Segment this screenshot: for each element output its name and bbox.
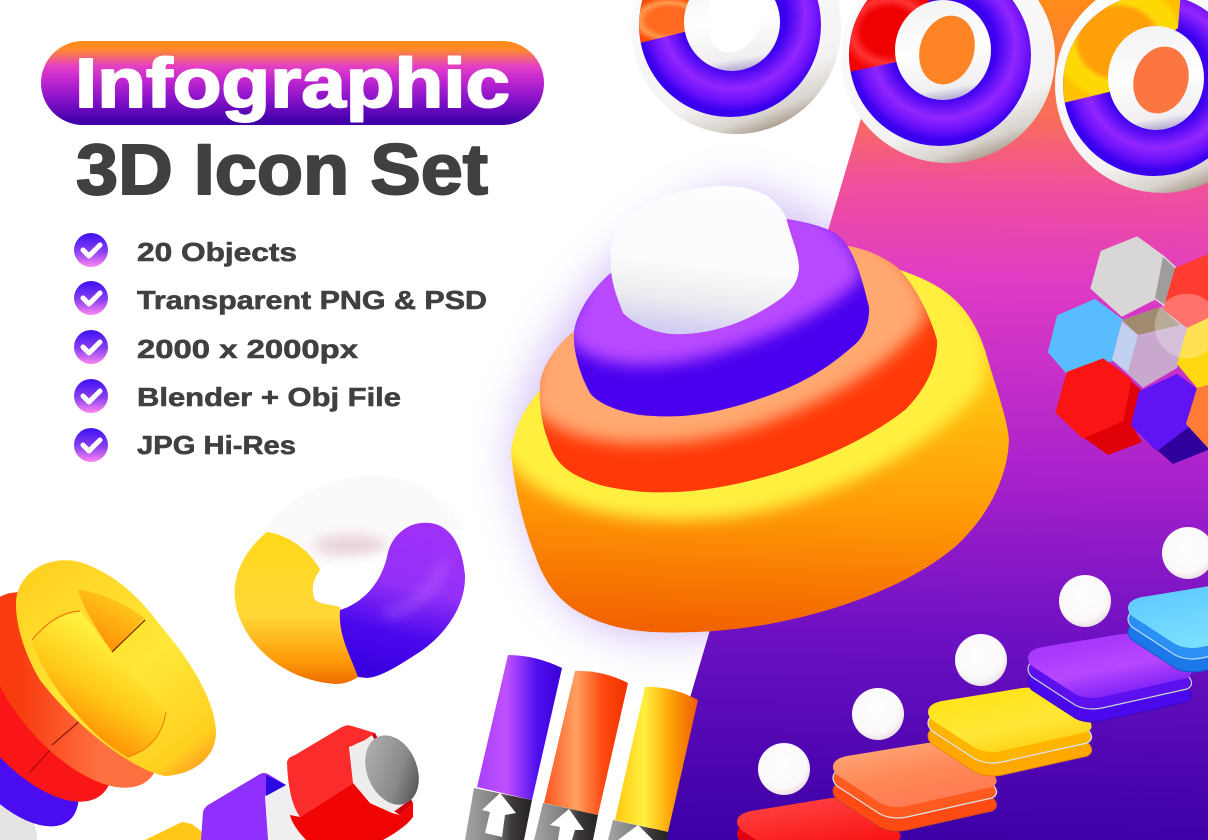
item: 20 Objects: 20 Objects: [137, 237, 297, 267]
yellow base layer: [495, 250, 1009, 633]
dark inner of red clip: [349, 733, 413, 815]
red hexagon lower: [1083, 380, 1143, 455]
top donut chart left: [630, 0, 841, 134]
item: 20 Objects: [74, 233, 297, 267]
item: JPG Hi-Res: [74, 428, 296, 462]
purple plate: [1028, 634, 1192, 722]
white tube: [266, 784, 312, 840]
orange plate: [833, 743, 997, 831]
main layered cone shape: [495, 186, 1009, 633]
orange hexagon: [1186, 385, 1208, 448]
arrow on orange bar: [550, 809, 584, 840]
white hexagon: [1092, 238, 1175, 315]
purple segment: [340, 523, 465, 678]
yellow plate: [928, 688, 1092, 776]
title word: Infographic: [75, 44, 510, 122]
lavender glow behind main shape: [511, 186, 1009, 640]
white top layer: [611, 186, 799, 334]
white cylinder: [350, 735, 410, 813]
purple ring: [0, 650, 104, 840]
item: Transparent PNG & PSD: [74, 281, 487, 315]
yellow clip: [145, 822, 202, 840]
red clip lower face: [290, 783, 413, 840]
tube with square clips: [145, 725, 429, 840]
yellow bar: [615, 687, 698, 832]
red plate: [737, 798, 901, 840]
purple bar: [477, 655, 562, 800]
item: Blender + Obj File: [74, 379, 401, 413]
stacked rings left: [0, 560, 216, 840]
hexagon cluster: [1049, 238, 1208, 464]
arrow on purple bar: [482, 793, 516, 837]
top donut chart middle: [840, 0, 1055, 163]
diagonal gradient background: [648, 0, 1208, 840]
top donut chart right: [1050, 0, 1208, 193]
tri-colour donut centre left: [235, 476, 465, 684]
white segment: [262, 476, 465, 570]
subtitle: 3D Icon Set: [76, 131, 488, 210]
glass centre hexagon: [1112, 307, 1187, 388]
red hexagon top right: [1163, 254, 1208, 328]
item: 2000 x 2000px: [74, 330, 359, 364]
item: Blender + Obj File: Blender + Obj File: [137, 382, 401, 412]
orange layer: [540, 246, 938, 492]
spheres: [758, 527, 1208, 795]
feature list: [74, 233, 487, 462]
white base ring: [0, 754, 53, 840]
red clip front face: [287, 725, 375, 817]
yellow ring: [16, 560, 216, 776]
blue plate: [1128, 584, 1208, 672]
yellow hexagon: [1177, 318, 1208, 388]
orange ring: [0, 562, 192, 818]
grey cap: [355, 727, 429, 813]
item: Transparent PNG & PSD: Transparent PNG & PSD: [137, 285, 487, 315]
step plates chart: [737, 527, 1208, 840]
red ring: [0, 595, 143, 829]
purple clip: [201, 773, 286, 840]
yellow segment: [235, 532, 358, 684]
orange bar: [544, 671, 628, 815]
arrow on yellow bar: [618, 825, 653, 840]
purple layer: [574, 219, 870, 416]
glass sphere: [1155, 294, 1208, 358]
title pill: [41, 41, 544, 125]
bar columns with arrows: [465, 655, 698, 840]
item: JPG Hi-Res: JPG Hi-Res: [137, 430, 296, 460]
item: 2000 x 2000px: 2000 x 2000px: [137, 334, 359, 364]
purple hexagon: [1157, 427, 1208, 464]
blue hexagon: [1049, 300, 1122, 374]
